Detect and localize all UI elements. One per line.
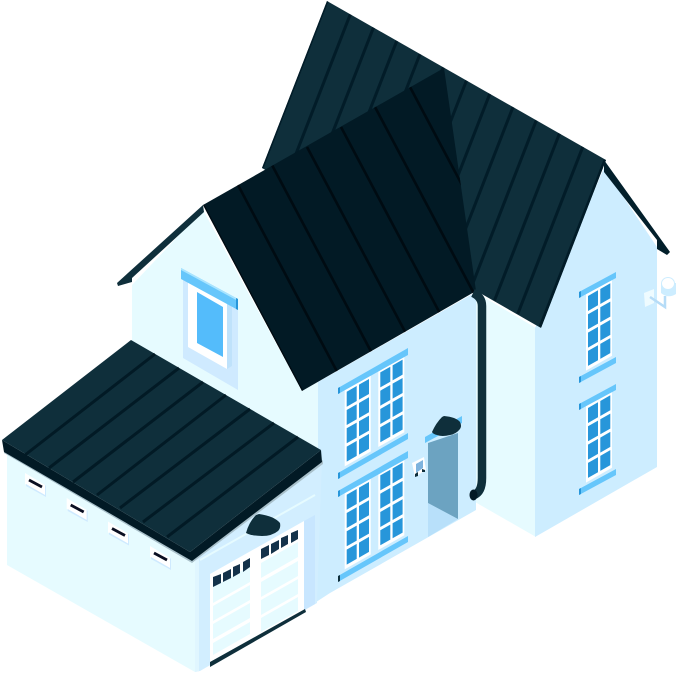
front roof [203, 70, 476, 391]
garage roof [2, 340, 323, 563]
garage door [210, 521, 306, 667]
garage wall vents [25, 473, 171, 570]
upper front window sills and panes [338, 348, 408, 479]
back roof [262, 1, 606, 328]
front right wall [310, 292, 476, 606]
lower front window sills and panes [338, 451, 408, 582]
front left gable wall [132, 210, 318, 470]
right lower window [579, 384, 616, 495]
garage front wall [195, 458, 322, 672]
garage left wall [7, 452, 195, 672]
dormer window [181, 268, 238, 390]
right gable wall [475, 168, 657, 537]
downpipe [470, 293, 482, 500]
front door [425, 416, 462, 537]
wall mounted security light [644, 278, 676, 307]
doorbell panel [412, 457, 426, 477]
front gable eave [117, 205, 204, 286]
right gable eave [604, 160, 670, 255]
door lamp [432, 416, 461, 436]
garage lamp [246, 514, 280, 536]
right upper window [579, 272, 616, 383]
